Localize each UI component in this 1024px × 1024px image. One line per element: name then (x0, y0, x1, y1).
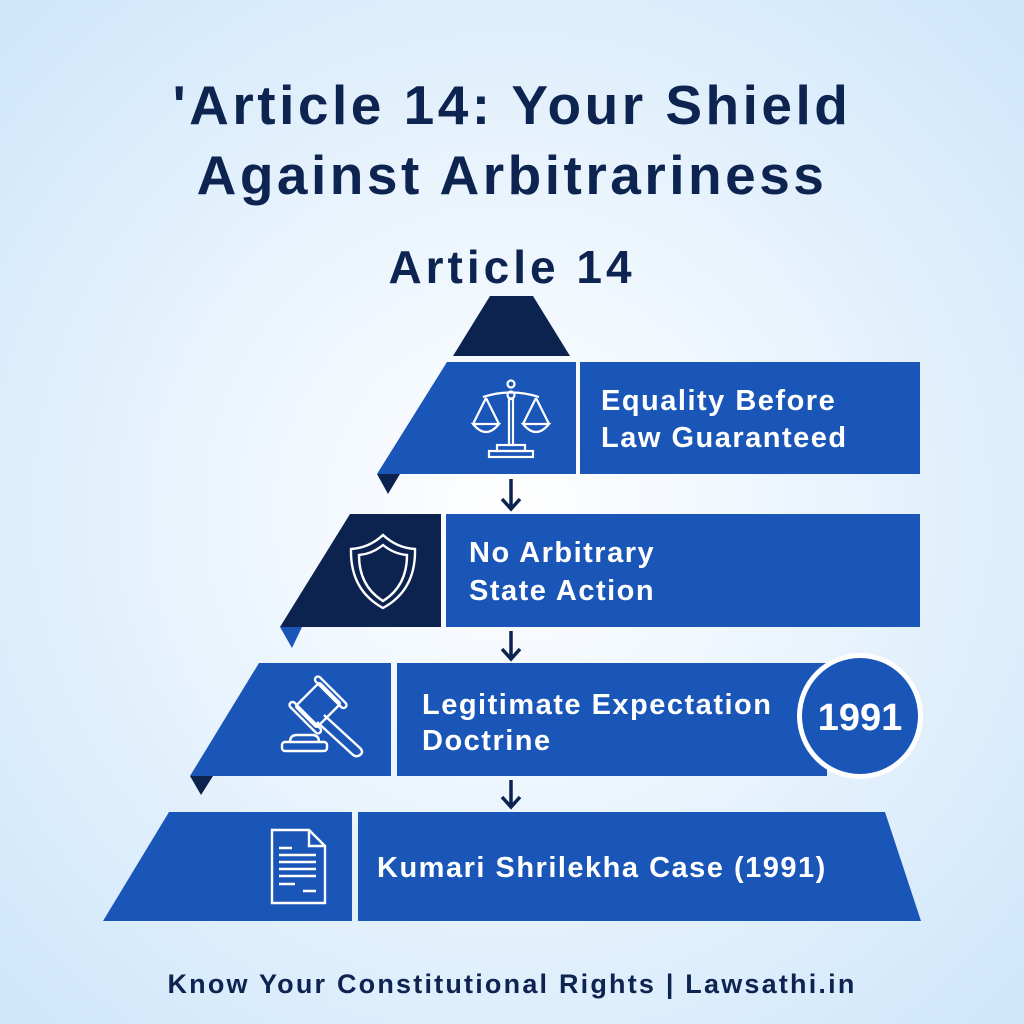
icon: shield (351, 535, 415, 608)
tier 2: no arbitrary action: State Action (469, 575, 655, 607)
text: no arbitrary: No Arbitrary (469, 537, 655, 569)
tier 1: equality before law: Law Guaranteed (601, 422, 848, 454)
title: Against Arbitrariness (197, 144, 827, 206)
tier 2: no arbitrary action (280, 514, 920, 648)
arrow 2 (502, 631, 520, 659)
icon: gavel (282, 675, 362, 756)
tier 3: legitimate expectation: Doctrine (422, 725, 552, 757)
tier 3: legitimate expectation (190, 653, 923, 795)
pyramid apex (453, 296, 570, 356)
tier 1: equality before law (377, 362, 920, 494)
arrow 3 (502, 780, 520, 807)
subtitle: Article 14: Article 14 (388, 241, 636, 293)
text: equality: Equality Before (601, 385, 836, 417)
title: 'Article 14: Your Shield (173, 74, 851, 136)
tier 4: case (103, 812, 921, 921)
badge: 1991: 1991 (818, 697, 902, 739)
badge: 1991 (797, 653, 923, 779)
footer: Know Your Constitutional Rights | Lawsathi.in (167, 969, 857, 999)
text: case: Kumari Shrilekha Case (1991) (377, 852, 827, 884)
icon: document (272, 830, 325, 903)
text: legitimate: Legitimate Expectation (422, 689, 772, 721)
icon: scales (473, 380, 549, 457)
title (173, 74, 851, 206)
arrow 1 (502, 479, 520, 509)
